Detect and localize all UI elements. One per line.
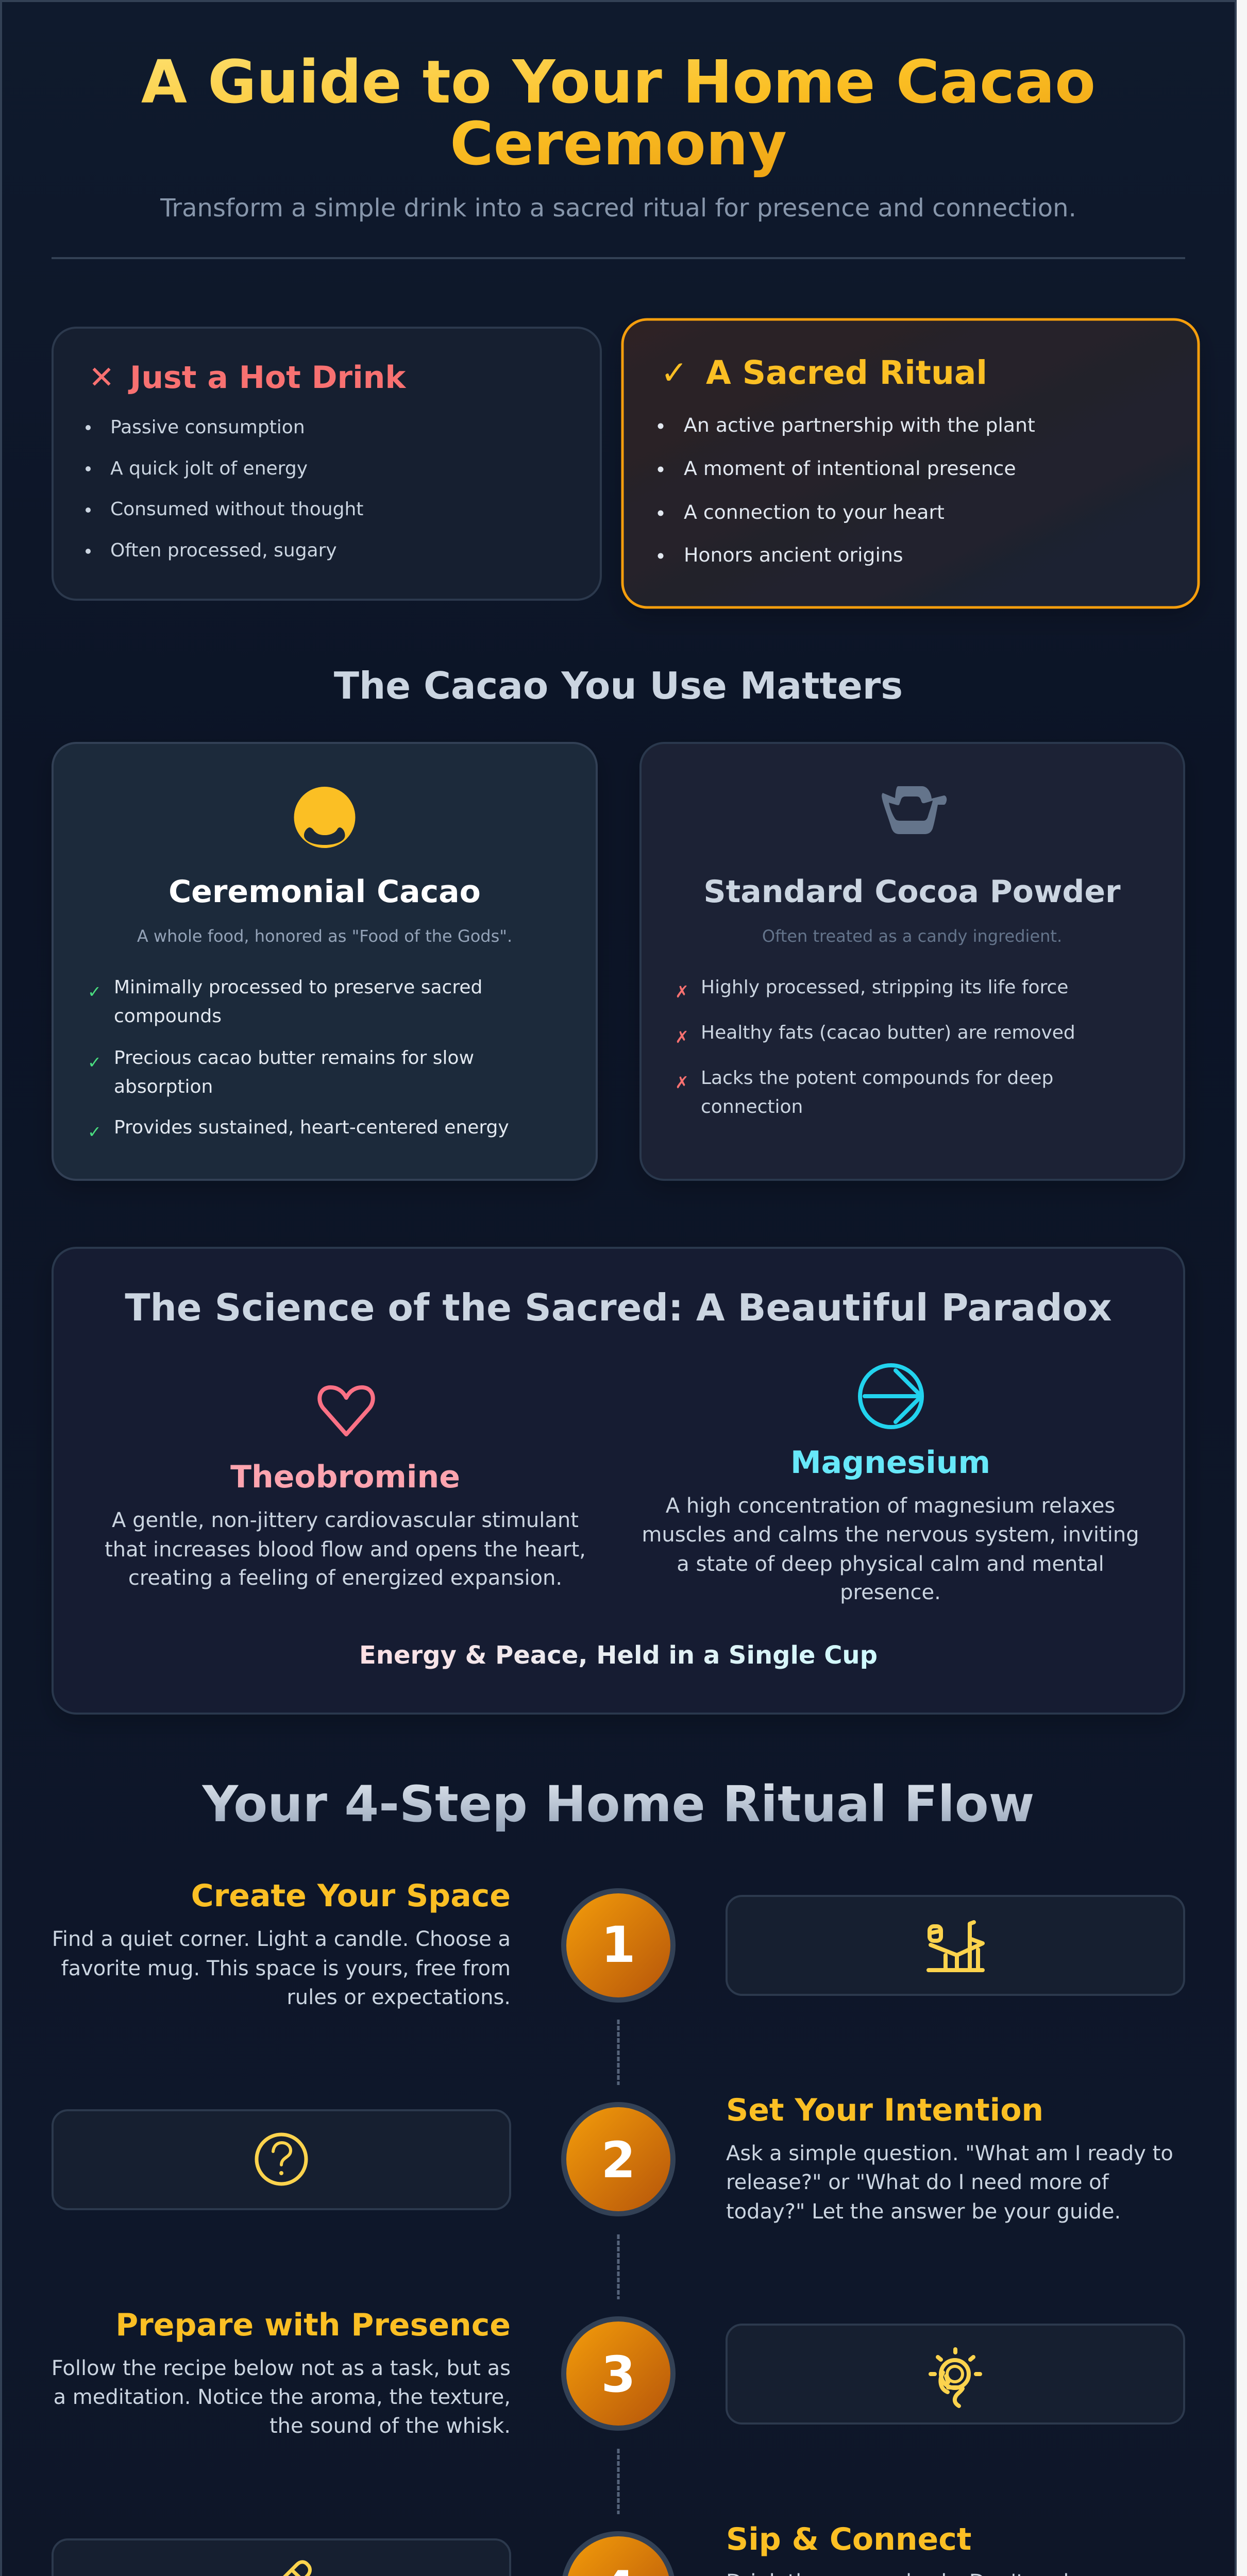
text bbox=[726, 2142, 1173, 2224]
heading: science of the sacred: The Science of the Sacred: A Beautiful Paradox bbox=[125, 1286, 1112, 1329]
header bbox=[52, 48, 1185, 259]
list: ceremonial benefits: absorption bbox=[114, 1076, 213, 1097]
list: ritual traits: Honors ancient origins bbox=[684, 544, 903, 566]
list: cocoa drawbacks bbox=[675, 977, 1075, 1117]
heading: Prepare with Presence bbox=[115, 2307, 511, 2343]
list: ceremonial benefits: ✓ bbox=[88, 982, 102, 1002]
icon: check: ✓ bbox=[661, 354, 688, 392]
list: hot drink traits bbox=[86, 417, 363, 561]
number badge: 2 bbox=[601, 2131, 635, 2189]
list: ritual traits: A connection to your heart bbox=[684, 501, 945, 523]
list: ritual traits bbox=[658, 414, 1035, 566]
number badge bbox=[564, 2319, 673, 2428]
subheading: Often treated as a candy ingredient. bbox=[762, 926, 1062, 946]
list: ceremonial benefits: Precious cacao butter remains for slow bbox=[114, 1047, 474, 1069]
text bbox=[52, 2357, 511, 2438]
list: hot drink traits: Often processed, sugary bbox=[110, 540, 337, 561]
list: ritual traits: A moment of intentional presence bbox=[684, 457, 1016, 480]
panel: just a hot drink bbox=[53, 328, 601, 600]
heading: Create Your Space bbox=[191, 1878, 511, 1914]
number badge bbox=[564, 2534, 673, 2576]
number badge: 3 bbox=[601, 2346, 635, 2403]
heading: theobromine: Theobromine bbox=[230, 1459, 460, 1495]
panel: science of the sacred bbox=[53, 1248, 1184, 1714]
text: theobromine: A gentle, non-jittery cardiovascular stimulant bbox=[112, 1509, 579, 1532]
title: Ceremony bbox=[450, 110, 787, 179]
list: cocoa drawbacks: ✗ bbox=[675, 982, 689, 1002]
icon: cocoa bowl bbox=[882, 786, 947, 834]
text: theobromine: creating a feeling of energized expansion. bbox=[128, 1566, 562, 1590]
heading: Sip & Connect bbox=[726, 2521, 971, 2557]
connector 3 to 4 bbox=[617, 2449, 619, 2514]
panel: standard cocoa powder bbox=[641, 743, 1184, 1180]
text: Find a quiet corner. Light a candle. Choose a bbox=[52, 1927, 511, 1951]
list: cocoa drawbacks: Healthy fats (cacao butter) are removed bbox=[701, 1022, 1075, 1043]
heading: a sacred ritual: A Sacred Ritual bbox=[706, 354, 987, 392]
list: ceremonial benefits: compounds bbox=[114, 1006, 222, 1027]
connector 1 to 2 bbox=[617, 2020, 619, 2085]
heading: just a hot drink: Just a Hot Drink bbox=[128, 360, 407, 396]
text: favorite mug. This space is yours, free from bbox=[61, 1957, 511, 1980]
panel: ceremonial cacao bbox=[53, 743, 597, 1180]
heading: 4-step ritual flow: Your 4-Step Home Ritual Flow bbox=[202, 1775, 1034, 1833]
number badge: 1 bbox=[601, 1916, 635, 1974]
icon: cross: ✕ bbox=[89, 360, 114, 396]
text: theobromine: that increases blood flow and opens the heart, bbox=[105, 1538, 586, 1562]
list: cocoa drawbacks: Lacks the potent compounds for deep bbox=[701, 1067, 1053, 1089]
text: magnesium: A high concentration of magnesium relaxes bbox=[666, 1494, 1115, 1518]
text: magnesium bbox=[642, 1494, 1139, 1604]
list: hot drink traits: Consumed without thought bbox=[110, 499, 363, 520]
list: hot drink traits: A quick jolt of energy bbox=[110, 458, 308, 479]
step 4: sip and connect bbox=[53, 2521, 1151, 2576]
step 1: create your space bbox=[52, 1878, 1184, 2009]
text: Follow the recipe below not as a task, but as bbox=[52, 2357, 511, 2380]
connector 2 to 3 bbox=[617, 2234, 619, 2299]
heading: magnesium: Magnesium bbox=[790, 1445, 990, 1481]
icon: cacao bean bbox=[294, 787, 356, 848]
heading: standard cocoa powder: Standard Cocoa Powder bbox=[703, 874, 1121, 910]
text: magnesium: presence. bbox=[840, 1581, 941, 1604]
subtitle: Transform a simple drink into a sacred ritual for presence and connection. bbox=[160, 194, 1076, 223]
text: the sound of the whisk. bbox=[269, 2414, 511, 2438]
list: ceremonial benefits bbox=[88, 977, 509, 1142]
heading: Set Your Intention bbox=[726, 2092, 1043, 2128]
icon: magnesium bbox=[860, 1365, 922, 1427]
text: rules or expectations. bbox=[287, 1986, 511, 2009]
list: cocoa drawbacks: ✗ bbox=[675, 1027, 689, 1047]
text: today?" Let the answer be your guide. bbox=[726, 2200, 1121, 2224]
icon: heart bbox=[319, 1387, 373, 1434]
icon box: question mark bbox=[53, 2110, 510, 2209]
text: magnesium: muscles and calms the nervous system, inviting bbox=[642, 1523, 1139, 1547]
text: theobromine bbox=[105, 1509, 586, 1590]
list: ceremonial benefits: Minimally processed to preserve sacred bbox=[114, 977, 482, 998]
text: release?" or "What do I need more of bbox=[726, 2171, 1109, 2194]
heading: ceremonial cacao: Ceremonial Cacao bbox=[168, 874, 481, 910]
list: cocoa drawbacks: Highly processed, stripping its life force bbox=[701, 977, 1068, 998]
number badge bbox=[564, 2105, 673, 2214]
list: ceremonial benefits: Provides sustained, heart-centered energy bbox=[114, 1117, 509, 1138]
list: ritual traits: An active partnership with the plant bbox=[684, 414, 1035, 436]
list: ceremonial benefits: ✓ bbox=[88, 1053, 102, 1072]
list: cocoa drawbacks: connection bbox=[701, 1096, 803, 1117]
list: ceremonial benefits: ✓ bbox=[88, 1122, 102, 1142]
icon box: candle and mug bbox=[727, 1896, 1184, 1995]
heading: the cacao you use matters: The Cacao You Use Matters bbox=[334, 664, 903, 707]
text bbox=[52, 1927, 511, 2009]
text: a meditation. Notice the aroma, the texture, bbox=[54, 2385, 511, 2409]
callout: energy and peace: Energy & Peace, Held in a Single Cup bbox=[359, 1641, 878, 1670]
text: magnesium: a state of deep physical calm and mental bbox=[677, 1552, 1104, 1576]
title: A Guide to Your Home Cacao bbox=[141, 48, 1096, 117]
list: hot drink traits: Passive consumption bbox=[110, 417, 305, 438]
icon box: lightbulb whisk bbox=[727, 2325, 1184, 2424]
panel: a sacred ritual bbox=[622, 319, 1199, 607]
step 3: prepare with presence bbox=[52, 2307, 1184, 2438]
list: cocoa drawbacks: ✗ bbox=[675, 1073, 689, 1092]
step 2: set your intention bbox=[53, 2092, 1173, 2224]
number badge bbox=[564, 1891, 673, 2000]
text: Ask a simple question. "What am I ready to bbox=[726, 2142, 1173, 2165]
icon box: pencil bbox=[53, 2539, 510, 2576]
subheading: A whole food, honored as "Food of the Gods". bbox=[137, 926, 512, 946]
